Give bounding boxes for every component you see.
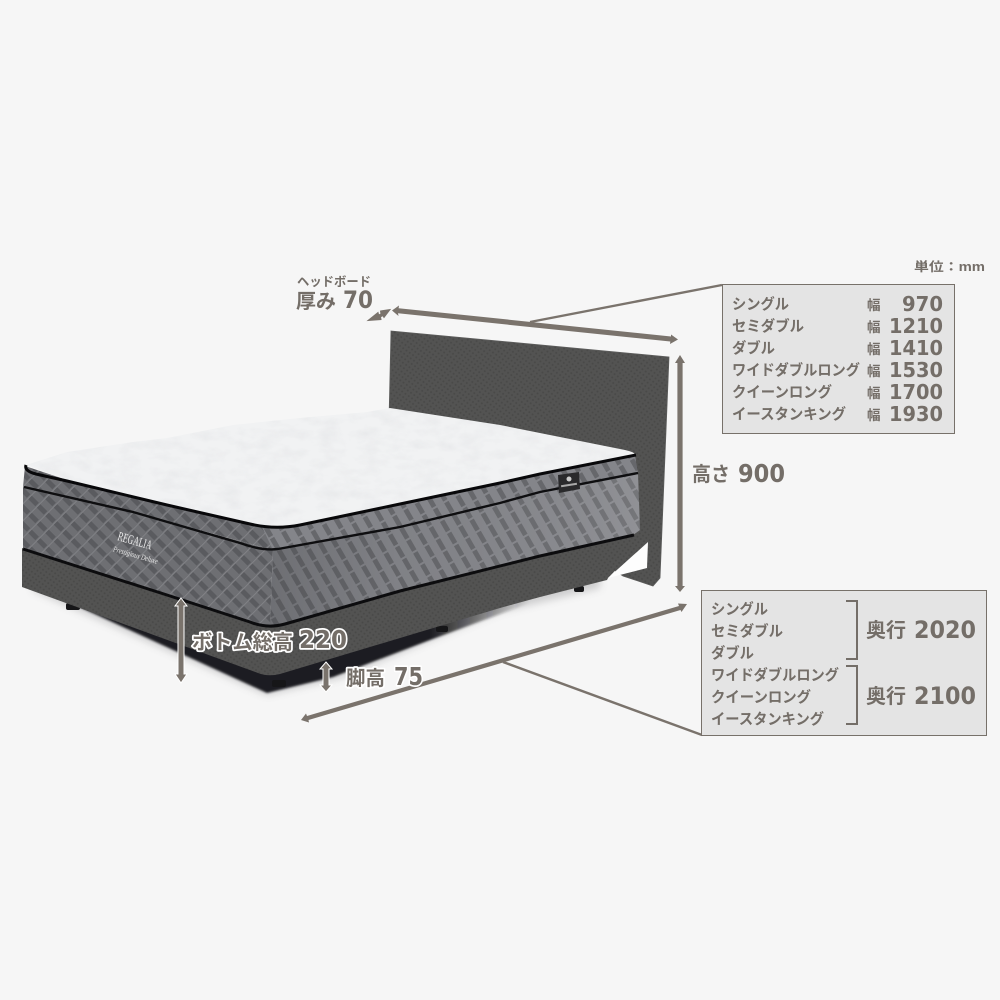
- row: queen long: クイーンロング: [732, 383, 832, 401]
- row: semi double: [732, 314, 943, 338]
- headboard: [389, 331, 669, 586]
- group 1 names: ダブル: [711, 644, 754, 662]
- row: semi double: 幅: [867, 320, 880, 335]
- group 2 names: [711, 666, 839, 728]
- row: semi double: 1210: [889, 314, 943, 338]
- label: headboard thickness: 厚み: [296, 291, 336, 313]
- label: height: 900: [738, 459, 785, 488]
- floor shadow soft: [32, 570, 600, 695]
- row: single: [732, 292, 943, 316]
- mattress top piping: [26, 455, 636, 527]
- arrow: headboard thickness: [368, 310, 390, 320]
- depth 2100: [866, 682, 976, 710]
- row: eastern king: 1930: [889, 402, 943, 426]
- group 2 names: イースタンキング: [711, 710, 824, 728]
- brand label: [558, 472, 580, 493]
- row: queen long: 1700: [889, 380, 943, 404]
- row: eastern king: 幅: [867, 408, 880, 423]
- bracket 2: [846, 666, 857, 724]
- label: headboard thickness: [296, 275, 373, 314]
- row: wide double long: [732, 358, 943, 382]
- mattress side shading: [270, 473, 640, 627]
- brand name: [111, 528, 164, 566]
- row: double: [732, 336, 943, 360]
- mattress black piping bottom: [23, 535, 634, 626]
- arrow: bottom total height: [175, 598, 187, 683]
- row: wide double long: ワイドダブルロング: [732, 361, 860, 379]
- row: single: シングル: [732, 295, 789, 313]
- mattress main side left: [23, 487, 273, 627]
- depth 2100: 2100: [914, 682, 976, 710]
- pillow top band left: [23, 466, 300, 550]
- box base: [22, 530, 640, 675]
- label: headboard thickness: ヘッドボード: [297, 275, 371, 289]
- mattress white top: [26, 408, 635, 527]
- base white bracket: [608, 542, 648, 578]
- pillow top lower piping: [24, 473, 638, 549]
- label: headboard thickness: 70: [343, 286, 373, 314]
- group 1 names: [711, 600, 783, 662]
- floor shadow dark: [60, 590, 530, 693]
- label: leg height: [346, 662, 423, 691]
- label: bottom total height: [192, 625, 347, 654]
- label: bottom total height: ボトム総高: [192, 631, 293, 654]
- mattress main side right: [270, 473, 640, 627]
- brand name: Prestigious Deluxe: [111, 544, 159, 566]
- row: queen long: [732, 380, 943, 404]
- label: bottom total height: 220: [299, 625, 347, 654]
- row: single: 幅: [867, 298, 880, 313]
- mattress quilting texture: [364, 432, 366, 434]
- label: height: 高さ: [692, 463, 730, 486]
- row: double: 幅: [867, 342, 880, 357]
- group 2 names: クイーンロング: [711, 688, 811, 706]
- depth 2020: 奥行: [866, 619, 906, 642]
- depth 2020: [866, 616, 976, 644]
- row: queen long: 幅: [867, 386, 880, 401]
- row: eastern king: [732, 402, 943, 426]
- label: height: [692, 459, 785, 488]
- depth 2100: 奥行: [866, 685, 906, 708]
- pillow top band right: [262, 455, 638, 550]
- leader line: width: [530, 285, 722, 322]
- label: leg height: 75: [394, 662, 423, 691]
- row: double: 1410: [889, 336, 943, 360]
- group 1 names: シングル: [711, 600, 768, 618]
- panel: width table: [722, 284, 954, 434]
- row: double: ダブル: [732, 339, 775, 357]
- bracket 1: [846, 601, 857, 659]
- row: eastern king: イースタンキング: [732, 405, 846, 423]
- bed legs: [66, 586, 584, 687]
- brand name: REGALIA: [116, 528, 154, 553]
- arrow: leg height: [320, 662, 332, 692]
- bed illustration: [20, 331, 669, 695]
- row: single: 970: [902, 292, 943, 316]
- group 1 names: セミダブル: [711, 622, 783, 640]
- panel: depth table: [702, 590, 986, 736]
- arrow: depth: [301, 604, 687, 722]
- arrow: height: [675, 355, 685, 592]
- depth 2020: 2020: [914, 616, 976, 644]
- leader line: depth: [503, 662, 702, 735]
- label: leg height: 脚高: [346, 667, 385, 690]
- row: semi double: セミダブル: [732, 317, 804, 335]
- group 2 names: ワイドダブルロング: [711, 666, 839, 684]
- arrow: width: [392, 306, 678, 344]
- unit note: 単位：mm: [914, 259, 985, 274]
- row: wide double long: 幅: [867, 364, 880, 379]
- row: wide double long: 1530: [889, 358, 943, 382]
